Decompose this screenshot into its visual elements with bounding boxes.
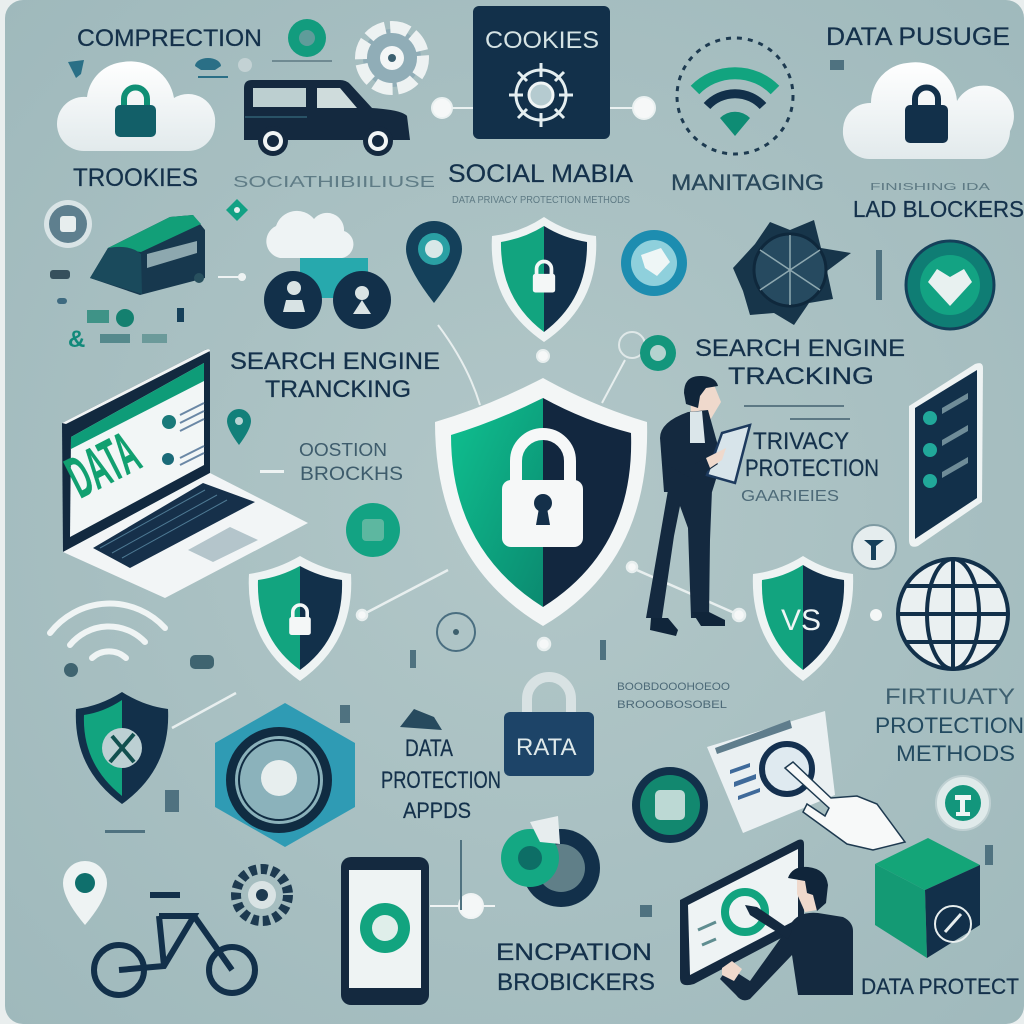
scattered glyphs left: & — [68, 326, 85, 353]
icon: wifi left — [50, 604, 165, 658]
connector dot — [870, 609, 882, 621]
label: search engine tracking left: SEARCH ENGINE — [230, 348, 440, 375]
label: fiduciary protection methods: FIRTIUATY — [885, 684, 1015, 709]
icon: laptop with data screen: DATA — [55, 418, 150, 510]
label: managing: MANITAGING — [671, 170, 824, 195]
label: search engine tracking left — [230, 348, 440, 403]
icon: van — [244, 80, 410, 156]
panel: cookies — [473, 6, 610, 139]
label: encryption blockers: BROBICKERS — [497, 969, 655, 996]
faint text right of padlock: BOOBDOOOHOEOO — [617, 681, 730, 693]
icon: green round badge — [632, 767, 708, 843]
icon: globe — [898, 559, 1008, 669]
icon: padlock data: RATA — [516, 734, 576, 761]
main shield with lock — [435, 378, 647, 626]
icon: wifi in dotted circle — [677, 38, 793, 154]
icon: dark spiky sphere — [733, 220, 851, 325]
label: encryption blockers: ENCPATION — [496, 939, 652, 966]
icon: small green badge — [288, 19, 326, 57]
label: privacy protection: PROTECTION — [745, 455, 879, 482]
icon: phone right — [909, 363, 983, 547]
icon: small pin — [227, 409, 251, 445]
label: search engine tracking right — [695, 335, 905, 390]
faint text: social influence: SOCIATHIBIILIUSE — [233, 174, 435, 191]
icon: cloud lock right — [843, 62, 1014, 159]
label: privacy protection — [745, 428, 879, 482]
icon: ring badge — [852, 525, 896, 569]
connector: cookies nodes — [432, 97, 655, 119]
small glyphs near compression — [68, 58, 332, 78]
icon: padlock data — [504, 677, 594, 776]
connector: shield line — [172, 693, 236, 728]
label: data protection apps: APPDS — [403, 798, 471, 823]
connector: small arrow — [218, 273, 246, 281]
faint dashes near tracking — [744, 405, 850, 420]
label: data protection apps: PROTECTION — [381, 767, 501, 794]
label: privacy protection: TRIVACY — [753, 428, 849, 455]
scattered fine glyphs — [105, 60, 993, 917]
icon: small green dot — [226, 199, 248, 221]
faint text right of padlock: BROOOBOSOBEL — [617, 699, 727, 711]
icon: green tunnel device — [90, 215, 205, 295]
icon: person at tablet — [680, 840, 853, 1000]
faint text under social media: DATA PRIVACY PROTECTION METHODS — [452, 195, 630, 206]
icon: paper with pointing hand — [707, 711, 905, 850]
faint text above lad blockers: FINISHING IDA — [870, 182, 991, 193]
icon: round stamp — [936, 776, 990, 830]
icon: two dark circles with cloud — [264, 211, 391, 329]
label: search engine tracking right: TRACKING — [728, 363, 874, 390]
icon: small dark glyphs — [64, 655, 214, 677]
connector: node — [430, 894, 495, 918]
label: fiduciary protection methods: PROTECTION — [875, 713, 1024, 738]
connector lines to main shield — [438, 325, 645, 405]
scattered glyphs left — [50, 270, 204, 353]
dash near position label — [260, 470, 284, 473]
icon: shield top — [492, 217, 596, 342]
faint text right of padlock — [617, 681, 730, 711]
icon: ring marker — [437, 613, 475, 651]
small dark hat glyph — [400, 709, 442, 730]
label: data protection apps: DATA — [405, 735, 453, 762]
icon: globe badge — [621, 230, 687, 296]
icon: phone bottom — [341, 857, 429, 1005]
icon: map pin bottom left — [63, 861, 107, 925]
label: trookies: TROOKIES — [73, 164, 198, 192]
label: data protect: DATA PROTECT — [861, 974, 1019, 999]
heading: compression: COMPRECTION — [77, 25, 262, 52]
connector: lines from main shield — [357, 562, 745, 650]
label: encryption blockers — [496, 939, 655, 996]
faint label: categories: GAARIEIES — [741, 488, 839, 505]
icon: vs shield — [753, 556, 853, 681]
icon: laptop with data screen — [55, 349, 308, 598]
label: fiduciary protection methods — [875, 684, 1024, 766]
icon: gear bottom — [236, 869, 288, 921]
icon: green heart badge — [906, 241, 994, 329]
label: position blockers: OOSTION — [299, 440, 387, 460]
label: social media: SOCIAL MABIA — [448, 160, 633, 188]
panel: cookies: COOKIES — [485, 27, 599, 54]
label: data protection apps — [381, 735, 501, 823]
icon: hexagon badge — [215, 703, 355, 847]
label: search engine tracking left: TRANCKING — [265, 376, 411, 403]
icon: location pin — [406, 221, 462, 303]
icon: overlapped green and dark discs — [501, 816, 600, 907]
person with tablet — [646, 376, 750, 636]
icon: bicycle — [94, 895, 255, 995]
label: fiduciary protection methods: METHODS — [896, 741, 1015, 766]
label: search engine tracking right: SEARCH ENGINE — [695, 335, 905, 362]
label: data pusuge: DATA PUSUGE — [826, 23, 1010, 51]
label: position blockers — [299, 440, 403, 485]
icon: shield left lower — [249, 556, 351, 681]
icon: vs shield: VS — [781, 604, 821, 637]
icon: shield x left — [76, 692, 168, 804]
icon: green cube — [875, 838, 980, 958]
icon: gear top — [361, 27, 423, 89]
icon: small round badge left — [44, 200, 92, 248]
icon: green circle badge — [346, 503, 400, 557]
icon: small teal coin — [640, 335, 676, 371]
label: position blockers: BROCKHS — [300, 464, 403, 485]
icon: cloud lock left — [57, 61, 215, 151]
